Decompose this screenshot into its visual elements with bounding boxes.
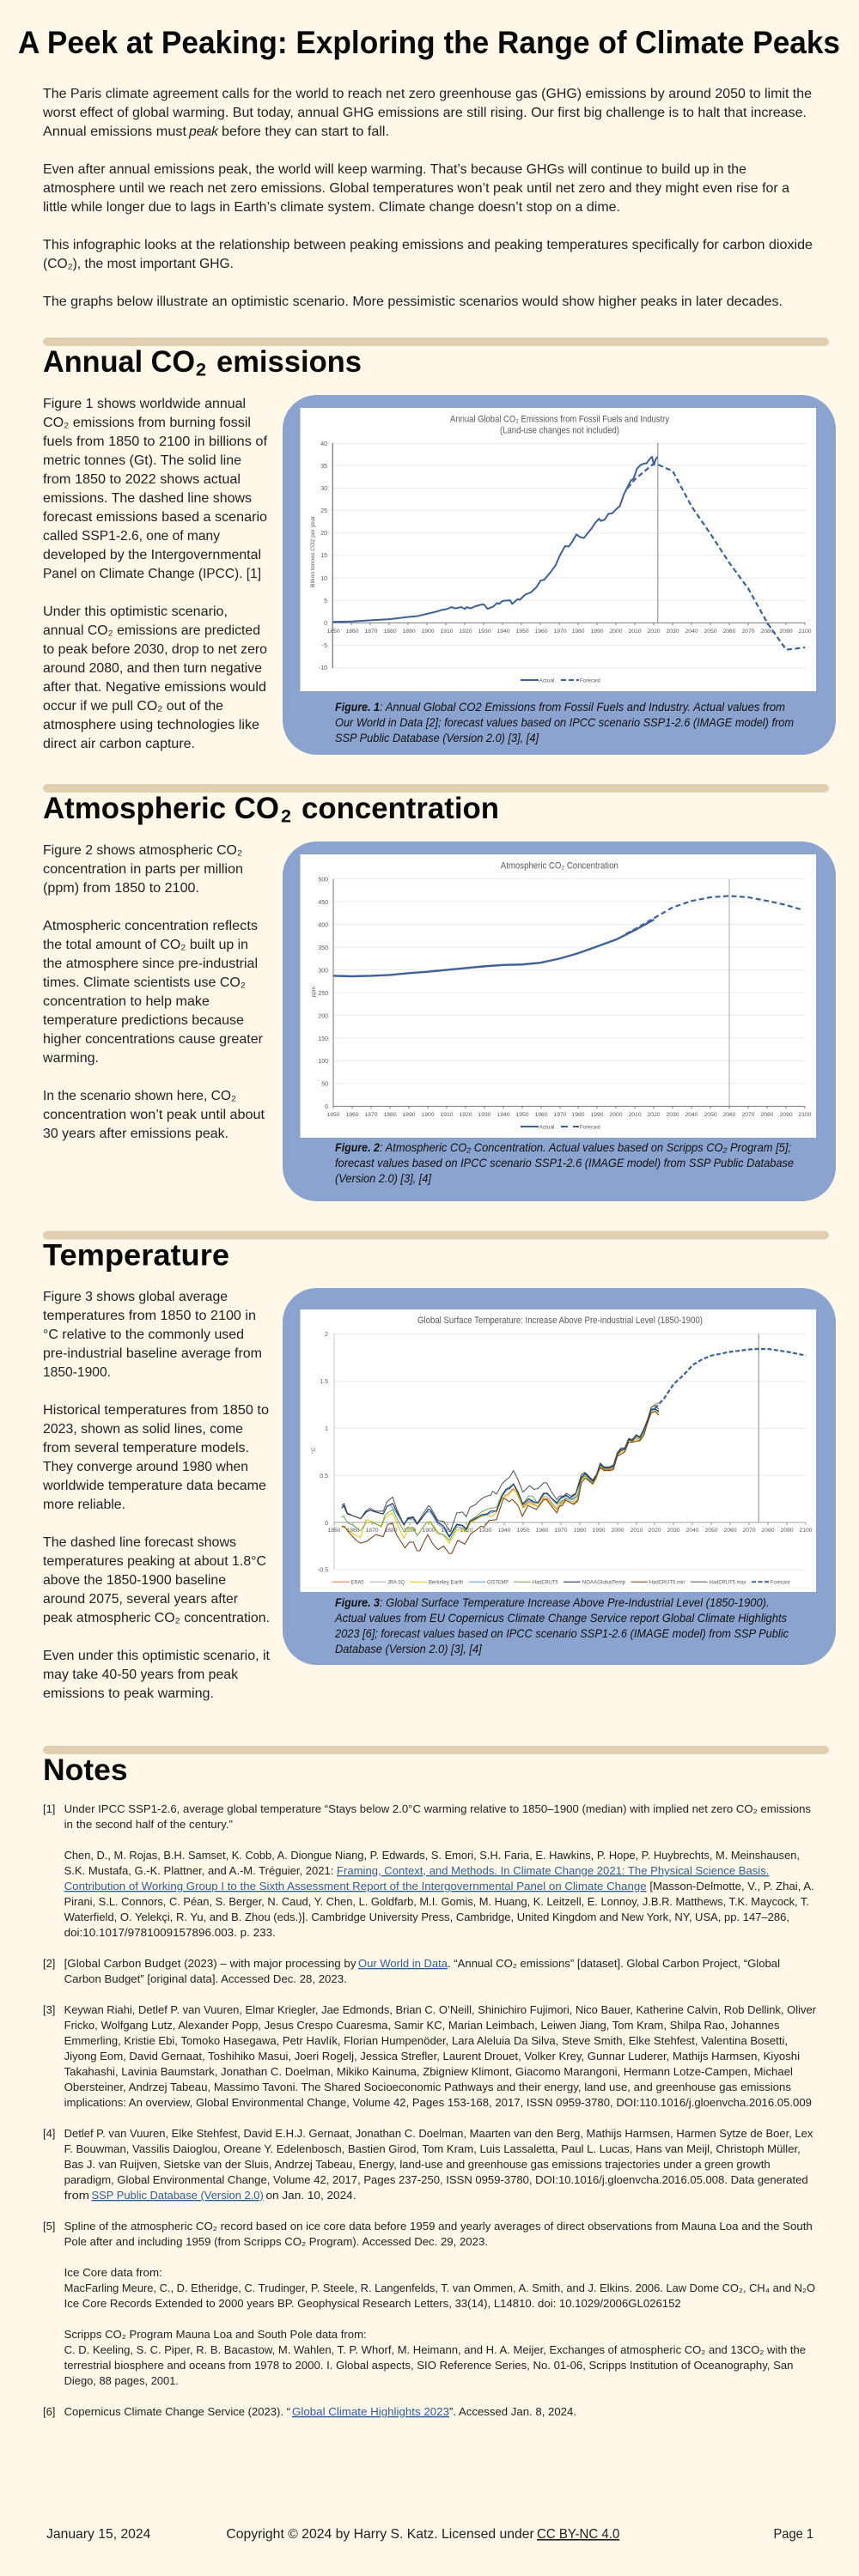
note 1: Framing, Context, and Methods. In Climate Change 2021: The Physical Science Basis. [337,1864,769,1877]
chart: atmospheric CO2 concentration: 2060 [722,1112,736,1118]
chart: global surface temperature: 1860 [346,1528,360,1534]
chart: global surface temperature: 2090 [780,1528,794,1534]
text block: figure 1 description: direct air carbon capture. [43,737,195,751]
text block: figure 3 description: from several temperature models. [43,1441,249,1455]
chart: annual global CO2 emissions: 2030 [666,629,679,635]
text block: figure 1 description: from 1850 to 2022 shows actual [43,472,241,487]
note 2: [Global Carbon Budget (2023) – with major processing by [64,1957,356,1970]
note 1: Waterfield, O. Yelekçi, R. Yu, and B. Zhou (eds.)]. Cambridge University Press, Cambridge, United Kingdom and New York, NY, USA, pp. 147–286, [64,1911,789,1923]
caption: figure 2: forecast values based on IPCC scenario SSP1-2.6 (IMAGE model) from SSP Public Database [335,1156,794,1170]
caption: figure 1: Our World in Data [2]; forecast values based on IPCC scenario SSP1-2.6 (IMAGE model) from [335,715,794,729]
chart: global surface temperature: 1850 [327,1528,341,1534]
chart legend [521,1125,600,1130]
chart legend: Actual [539,1125,555,1130]
chart: atmospheric CO2 concentration: 1880 [383,1112,397,1118]
caption: figure 3: Database (Version 2.0) [3], [4] [335,1642,483,1656]
chart: global surface temperature: 2000 [611,1528,624,1534]
note 6: [6] [43,2405,55,2418]
text block: figure 1 description: to peak before 2030, drop to net zero [43,642,267,657]
note 1: S.K. Mustafa, G.-K. Plattner, and A.-M. Tréguier, 2021: [64,1864,333,1877]
chart legend: GISTEMP [487,1580,509,1586]
chart: global surface temperature: 1980 [573,1528,587,1534]
text block: figure 1 description: occur if we pull CO₂ out of the [43,699,223,714]
chart: annual global CO2 emissions: 1880 [383,629,397,635]
chart: annual global CO2 emissions: 35 [320,464,327,470]
note 5: terrestrial biosphere and oceans from 1978 to 2000. I. Global aspects, SIO Reference Series, No. 01-06, Scripps Institution of Oceanography, San [64,2359,794,2372]
footer: Copyright © 2024 by Harry S. Katz. Licensed under [226,2527,534,2542]
text block: figure 3 description: may take 40-50 years from peak [43,1668,239,1682]
chart: annual global CO2 emissions: 2100 [798,629,812,635]
chart: atmospheric CO2 concentration: 0 [325,1104,328,1110]
note 4: [4] [43,2127,55,2140]
chart: atmospheric CO2 concentration: 1990 [590,1112,604,1118]
heading: annual emissions [43,345,362,380]
chart: annual global CO2 emissions: 30 [320,486,327,492]
chart legend: HadCRUT5 max [710,1580,746,1586]
caption: figure 2 [335,1140,794,1185]
caption: figure 1: SSP Public Database (Version 2.0) [3], [4] [335,731,539,744]
text block: figure 2 description: concentration in parts per million [43,862,243,877]
chart legend: Forecast [771,1580,790,1586]
chart: atmospheric CO2 concentration: 250 [318,991,328,997]
footer: CC BY-NC 4.0 [537,2527,619,2542]
chart: atmospheric CO2 concentration: 2030 [666,1112,679,1118]
chart: annual global CO2 emissions [301,408,816,691]
note 3: Jiyong Eom, David Gernaat, Toshihiko Masui, Joeri Rogelj, Jessica Strefler, Laurent Drouet, Volker Krey, Gunnar Luderer, Mathijs Harmsen, Kiyoshi [64,2050,800,2063]
intro text block: (CO₂), the most important GHG. [43,257,234,271]
chart: annual global CO2 emissions: 1920 [459,629,472,635]
chart: annual global CO2 emissions: 2040 [685,629,698,635]
heading: atmospheric concentration: Atmospheric CO [43,792,279,825]
text block: figure 2 description: times. Climate scientists use CO₂ [43,975,246,990]
text block: figure 1 description: around 2080, and then turn negative [43,661,262,676]
note 3: Keywan Riahi, Detlef P. van Vuuren, Elmar Kriegler, Jae Edmonds, Brian C. O’Neill, Shinichiro Fujimori, Nico Bauer, Katherine Calvin, Rob Dellink, Oliver [64,2003,817,2016]
note 5: C. D. Keeling, S. C. Piper, R. B. Bacastow, M. Wahlen, T. P. Whorf, M. Heimann, and H. A. Meijer, Exchanges of atmospheric CO₂ and 13CO₂ with the [64,2343,806,2356]
text block: figure 3 description: emissions to peak warming. [43,1686,214,1701]
chart: atmospheric CO2 concentration: 1860 [345,1112,359,1118]
chart: atmospheric CO2 concentration: 1930 [478,1112,491,1118]
caption: figure 2: Figure. 2 [335,1140,380,1154]
section: annual emissions [43,337,836,755]
chart: global surface temperature: 2 [325,1332,328,1338]
note 5: MacFarling Meure, C., D. Etheridge, C. Trudinger, P. Steele, R. Langenfelds, T. van Ommen, A. Smith, and J. Elkins. 2006. Law Dome CO₂, CH₄ and N₂O [64,2281,815,2294]
note 2: Our World in Data [358,1957,448,1970]
note 2: [2] [43,1957,55,1970]
text block: figure 3 description: 1850-1900. [43,1365,111,1380]
text block: figure 3 description: The dashed line forecast shows [43,1535,236,1550]
note 5: Scripps CO₂ Program Mauna Loa and South Pole data from: [64,2328,367,2341]
chart: global surface temperature: 1950 [516,1528,530,1534]
text block: figure 2 description: the atmosphere since pre-industrial [43,957,258,971]
chart: global surface temperature: 1900 [422,1528,436,1534]
chart legend [332,1580,790,1586]
text block: figure 3 description: Figure 3 shows global average [43,1290,228,1304]
chart: annual global CO2 emissions: 2080 [760,629,774,635]
chart: atmospheric CO2 concentration: 1940 [497,1112,510,1118]
text block: figure 3 description: temperatures from 1850 to 2100 in [43,1309,256,1323]
text block: figure 3 description: more reliable. [43,1498,125,1512]
heading: atmospheric concentration: concentration [302,792,499,825]
text block: figure 3 description: around 2075, several years after [43,1592,239,1607]
chart: global surface temperature: 1940 [497,1528,511,1534]
text block: figure 3 description: temperatures peaking at about 1.8°C [43,1554,266,1569]
chart: atmospheric CO2 concentration: 1950 [515,1112,529,1118]
chart: atmospheric CO2 concentration: Atmospheric CO₂ Concentration [501,861,618,872]
text block: figure 2 description: higher concentrations cause greater [43,1032,264,1047]
text block: figure 1 description: metric tonnes (Gt). The solid line [43,453,241,468]
chart: global surface temperature: 2080 [761,1528,775,1534]
note 5 [43,2220,815,2387]
text block: figure 2 description [42,843,265,1141]
chart: global surface temperature: 0 [325,1521,328,1527]
chart: atmospheric CO2 concentration: 1910 [440,1112,454,1118]
chart: atmospheric CO2 concentration: 400 [318,922,328,929]
caption: figure 3: : Global Surface Temperature Increase Above Pre-Industrial Level (1850-1900). [380,1595,770,1609]
footer [46,2527,813,2542]
title: A Peek at Peaking: Exploring the Range of Climate Peaks [18,25,840,60]
section: notes [43,1746,829,2418]
section: atmospheric concentration [42,784,836,1201]
text block: figure 1 description: forecast emissions based a scenario [43,510,267,525]
chart: global surface temperature: 1990 [592,1528,606,1534]
chart: global surface temperature: 0.5 [320,1473,328,1479]
text block: figure 1 description: called SSP1-2.6, one of many [43,529,220,544]
chart: atmospheric CO2 concentration: 50 [321,1082,328,1087]
chart: annual global CO2 emissions: 1890 [402,629,416,635]
chart: global surface temperature: 1930 [478,1528,492,1534]
text block: figure 3 description: pre-industrial baseline average from [43,1346,262,1361]
chart: atmospheric CO2 concentration: 2040 [685,1112,698,1118]
panel: figure 1 [283,395,836,755]
text block: figure 3 description [42,1290,271,1701]
chart: global surface temperature: 2040 [685,1528,699,1534]
intro text block: The graphs below illustrate an optimistic scenario. More pessimistic scenarios would show higher peaks in later decades. [43,295,783,309]
panel: figure 2 [283,841,836,1201]
heading: temperature: Temperature [43,1238,229,1273]
text block: figure 2 description: the total amount of CO₂ built up in [43,938,248,952]
caption: figure 1 [335,700,794,744]
chart: annual global CO2 emissions: 2070 [741,629,755,635]
chart: annual global CO2 emissions: -5 [322,643,327,649]
chart: atmospheric CO2 concentration: 1960 [534,1112,548,1118]
heading: atmospheric concentration: 2 [281,807,291,826]
text block: figure 1 description: annual CO₂ emissions are predicted [43,623,260,638]
note 4: on Jan. 10, 2024. [266,2189,356,2202]
text block: figure 3 description: °C relative to the commonly used [43,1327,244,1342]
chart: atmospheric CO2 concentration: 2070 [741,1112,755,1118]
chart: annual global CO2 emissions: 2090 [779,629,793,635]
caption: figure 3: Actual values from EU Copernicus Climate Change Service report Global Climate Highlights [334,1611,787,1625]
text block: figure 2 description: Atmospheric concentration reflects [43,919,258,933]
text block: figure 3 description: Even under this optimistic scenario, it [43,1649,271,1663]
note 1: [Masson-Delmotte, V., P. Zhai, A. [649,1880,814,1893]
chart: annual global CO2 emissions: 0 [324,621,327,627]
chart: annual global CO2 emissions: 1900 [421,629,435,635]
text block: figure 2 description: Figure 2 shows atmospheric CO₂ [43,843,242,858]
chart: atmospheric CO2 concentration: 100 [318,1059,328,1065]
chart: atmospheric CO2 concentration: ppm [311,987,317,997]
chart: annual global CO2 emissions: 1960 [534,629,548,635]
chart: atmospheric CO2 concentration: 500 [318,878,328,883]
note 3: [3] [43,2003,55,2016]
chart: annual global CO2 emissions: -10 [319,665,327,671]
chart: annual global CO2 emissions: 2000 [609,629,623,635]
note 1: Under IPCC SSP1-2.6, average global temperature “Stays below 2.0°C warming relative to 1850–1900 (median) with implied net zero CO₂ emissions [64,1802,811,1815]
chart: global surface temperature: 2020 [648,1528,661,1534]
chart: annual global CO2 emissions: 1910 [440,629,454,635]
chart legend: Forecast [580,1125,600,1130]
text block: figure 2 description: 30 years after emissions peak. [43,1127,228,1141]
chart: annual global CO2 emissions: 1860 [345,629,359,635]
heading: annual emissions: 2 [196,361,206,380]
chart: annual global CO2 emissions: 1850 [326,629,340,635]
note 1: Pirani, S.L. Connors, C. Péan, S. Berger, N. Caud, Y. Chen, L. Goldfarb, M.I. Gomis, M. Huang, K. Leitzell, E. Lonnoy, J.B.R. Matthews, T.K. Maycock, T. [64,1895,809,1908]
caption: figure 1: Figure. 1 [335,700,380,714]
chart: annual global CO2 emissions: 2020 [647,629,661,635]
note 5: Spline of the atmospheric CO₂ record based on ice core data before 1959 and yearly averages of direct observations from Mauna Loa and the South [64,2220,813,2233]
footer: January 15, 2024 [46,2527,150,2542]
text block: figure 1 description: developed by the Intergovernmental [43,548,261,562]
note 6: Global Climate Highlights 2023 [292,2405,449,2418]
chart legend: ERA5 [350,1580,364,1586]
chart legend: NOAAGlobalTemp [582,1580,625,1586]
chart: global surface temperature: 2060 [723,1528,737,1534]
note 3: Emmerling, Kristie Ebi, Tomoko Hasegawa, Petr Havlík, Florian Humpenöder, Lara Aleluia Da Silva, Steve Smith, Elke Stehfest, Valentina Bosetti, [64,2034,788,2047]
note 1 [43,1802,814,1939]
chart: global surface temperature: 2050 [704,1528,718,1534]
caption: figure 2: (Version 2.0) [3], [4] [335,1171,432,1185]
text block: figure 1 description: atmosphere using technologies like [43,718,259,732]
chart: atmospheric CO2 concentration: 1970 [553,1112,567,1118]
note 3: Obersteiner, Andrzej Tabeau, Massimo Tavoni. The Shared Socioeconomic Pathways and their energy, land use, and greenhouse gas emissions [64,2081,791,2093]
note 4: from [64,2189,89,2202]
chart: annual global CO2 emissions: 10 [320,576,327,582]
caption: figure 2: : Atmospheric CO₂ Concentration. Actual values based on Scripps CO₂ Program [5]; [380,1140,791,1154]
intro text block: worst effect of global warming. But today, annual GHG emissions are still rising. Our first big challenge is to halt that increase. [42,106,807,120]
intro text block: little while longer due to lags in Earth’s climate system. Climate change doesn’t stop on a dime. [43,200,620,215]
text block: figure 3 description: They converge around 1980 when [43,1460,248,1474]
note 6: Copernicus Climate Change Service (2023). “ [64,2405,290,2418]
chart: atmospheric CO2 concentration: 200 [318,1013,328,1020]
text block: figure 3 description: worldwide temperature data became [42,1479,266,1493]
chart: annual global CO2 emissions: 20 [320,531,327,537]
chart: annual global CO2 emissions: 1980 [571,629,585,635]
chart: atmospheric CO2 concentration [301,854,816,1138]
chart: global surface temperature: 1 [325,1426,328,1432]
text block: figure 3 description: above the 1850-1900 baseline [43,1573,226,1588]
intro text block [42,87,813,309]
chart: atmospheric CO2 concentration: 1920 [459,1112,472,1118]
chart: annual global CO2 emissions: 1950 [515,629,529,635]
chart: atmospheric CO2 concentration: 2050 [704,1112,717,1118]
text block: figure 2 description: (ppm) from 1850 to 2100. [43,881,199,896]
note 6: ”. Accessed Jan. 8, 2024. [449,2405,576,2418]
note 2: Carbon Budget” [original data]. Accessed Dec. 28, 2023. [64,1972,347,1985]
intro text block: Annual emissions must [43,125,187,139]
chart: annual global CO2 emissions: 2060 [722,629,736,635]
note 5: Ice Core Records Extended to 2000 years BP. Geophysical Research Letters, 33(14), L14810. doi: 10.1029/2006GL026152 [64,2297,681,2310]
chart: annual global CO2 emissions: 25 [320,508,327,514]
text block: figure 3 description: 2023, shown as solid lines, come [43,1422,243,1437]
chart legend: Forecast [580,678,600,683]
chart: global surface temperature: 1870 [365,1528,379,1534]
text block: figure 3 description: peak atmospheric CO₂ concentration. [43,1611,270,1625]
chart: atmospheric CO2 concentration: 2020 [647,1112,661,1118]
chart: atmospheric CO2 concentration: 1980 [571,1112,585,1118]
note 3: Takahashi, Lavinia Baumstark, Jonathan C. Doelman, Mikiko Kainuma, Zbigniew Klimont, Giacomo Marangoni, Hermann Lotze-Campen, Michael [64,2065,793,2078]
text block: figure 2 description: concentration won’t peak until about [43,1108,265,1122]
chart legend: JRA-3Q [387,1580,405,1586]
text block: figure 3 description: Historical temperatures from 1850 to [43,1403,269,1418]
intro text block: before they can start to fall. [222,125,389,139]
chart legend [521,678,600,683]
text block: figure 2 description: temperature predictions because [43,1013,244,1028]
text block: figure 1 description: fuels from 1850 to 2100 in billions of [43,434,268,449]
heading: annual emissions: Annual CO [43,345,195,379]
chart: annual global CO2 emissions: (Land-use changes not included) [500,426,619,436]
text block: figure 1 description [43,397,268,751]
chart: atmospheric CO2 concentration: 450 [318,900,328,906]
intro text block: Even after annual emissions peak, the world will keep warming. That’s because GHGs will continue to build up in the [43,162,746,177]
note 2: . “Annual CO₂ emissions” [dataset]. Global Carbon Project, “Global [448,1957,780,1970]
note 1: Contribution of Working Group I to the Sixth Assessment Report of the Intergovernmental Panel on Climate Change [64,1880,647,1893]
caption: figure 3: Figure. 3 [335,1595,380,1609]
intro text block: peak [188,125,219,139]
caption: figure 3 [334,1595,789,1656]
chart: global surface temperature: °C [310,1447,317,1454]
chart: annual global CO2 emissions: 1990 [590,629,604,635]
note 4: F. Bouwman, Vassilis Daioglou, Oreane Y. Edelenbosch, Bastien Girod, Tom Kram, Luis Lassaletta, Paul L. Lucas, Hans van Meijl, Christoph Müller, [64,2142,801,2155]
chart: annual global CO2 emissions: 1930 [478,629,491,635]
chart: annual global CO2 emissions: 5 [324,598,327,605]
chart: annual global CO2 emissions: Annual Global CO₂ Emissions from Fossil Fuels and Industry [450,415,669,425]
note 2 [43,1957,780,1985]
chart: global surface temperature: 1.5 [320,1379,328,1385]
chart: global surface temperature: 2030 [667,1528,680,1534]
chart: atmospheric CO2 concentration: 150 [318,1036,328,1042]
text block: figure 1 description: Under this optimistic scenario, [43,605,228,619]
chart: global surface temperature: 1970 [554,1528,568,1534]
note 4: SSP Public Database (Version 2.0) [91,2189,264,2202]
heading: notes: Notes [43,1753,128,1787]
chart: annual global CO2 emissions: 40 [320,441,327,447]
text block: figure 2 description: In the scenario shown here, CO₂ [43,1089,236,1103]
note 4 [43,2127,813,2202]
chart: annual global CO2 emissions: 1970 [553,629,567,635]
text block: figure 1 description: Figure 1 shows worldwide annual [43,397,246,411]
chart legend: Actual [539,678,555,683]
note 6 [43,2405,576,2418]
note 1: Chen, D., M. Rojas, B.H. Samset, K. Cobb, A. Diongue Niang, P. Edwards, S. Emori, S.H. Faria, E. Hawkins, P. Hope, P. Huybrechts, M. Meinshausen, [64,1849,800,1862]
chart: atmospheric CO2 concentration: 350 [318,945,328,951]
note 5: Diego, 88 pages, 2001. [64,2374,179,2387]
note 1: doi:10.1017/9781009157896.003. p. 233. [64,1926,276,1939]
chart: atmospheric CO2 concentration: 2000 [609,1112,623,1118]
chart: global surface temperature: 1880 [384,1528,398,1534]
caption: figure 3: 2023 [6]; forecast values based on IPCC scenario SSP1-2.6 (IMAGE model) from SSP Public [334,1626,789,1640]
chart: global surface temperature: 1890 [403,1528,417,1534]
intro text block: This infographic looks at the relationship between peaking emissions and peaking temperatures specifically for carbon dioxide [43,238,813,252]
text block: figure 1 description: emissions. The dashed line shows [43,491,252,506]
note 1: in the second half of the century.” [64,1818,233,1831]
note 1: [1] [43,1802,55,1815]
text block: figure 2 description: warming. [42,1051,99,1066]
intro text block: The Paris climate agreement calls for the world to reach net zero greenhouse gas (GHG) emissions by around 2050 to limit the [43,87,812,101]
chart: annual global CO2 emissions: 1940 [497,629,510,635]
chart: atmospheric CO2 concentration: 1850 [326,1112,340,1118]
chart: atmospheric CO2 concentration: 1900 [421,1112,435,1118]
note 5: Ice Core data from: [64,2266,162,2279]
note 3: Fricko, Wolfgang Lutz, Alexander Popp, Jesus Crespo Cuaresma, Samir KC, Marian Leimbach, Leiwen Jiang, Tom Kram, Shilpa Rao, Johannes [64,2019,780,2032]
chart: atmospheric CO2 concentration: 2090 [779,1112,793,1118]
note 3 [43,2003,817,2109]
chart: atmospheric CO2 concentration: 300 [318,969,328,974]
chart legend: Berkeley Earth [429,1580,464,1586]
chart: global surface temperature: Global Surface Temperature: Increase Above Pre-industrial Level (1850-1900) [417,1315,703,1326]
chart legend: HadCRUT5 min [649,1580,685,1586]
text block: figure 1 description: after that. Negative emissions would [43,680,266,695]
note 5: [5] [43,2220,55,2233]
chart: annual global CO2 emissions: 1870 [364,629,378,635]
chart: global surface temperature: 1960 [535,1528,549,1534]
chart: atmospheric CO2 concentration: 2080 [760,1112,774,1118]
heading: annual emissions: emissions [216,345,362,379]
chart: atmospheric CO2 concentration: 1870 [364,1112,378,1118]
chart: global surface temperature: 1920 [460,1528,473,1534]
section: temperature [42,1231,836,1701]
chart: global surface temperature [301,1309,816,1592]
footer: Page 1 [773,2527,813,2542]
note 4: Bas J. van Ruijven, Sietske van der Sluis, Andrzej Tabeau, Energy, land-use and greenhouse gas emissions trajectories under a green growth [64,2158,771,2171]
chart legend: HadCRUT5 [533,1580,558,1586]
chart: global surface temperature: 1910 [441,1528,454,1534]
note 4: Detlef P. van Vuuren, Elke Stehfest, David E.H.J. Gernaat, Jonathan C. Doelman, Maarten van den Berg, Mathijs Harmsen, Harmen Sytze de Boer, Lex [64,2127,813,2140]
chart: global surface temperature: 2070 [742,1528,756,1534]
intro text block: atmosphere until we reach net zero emissions. Global temperatures won’t peak until net zero and they might even rise for a [43,181,789,196]
chart: annual global CO2 emissions: Billion tonnes CO2 per year [310,515,316,587]
chart: annual global CO2 emissions: 2010 [628,629,642,635]
caption: figure 1: : Annual Global CO2 Emissions from Fossil Fuels and Industry. Actual values from [380,700,785,714]
note 5: Pole after and including 1959 (from Scripps CO₂ Program). Accessed Dec. 29, 2023. [64,2235,488,2248]
heading: atmospheric concentration [43,792,499,826]
chart: annual global CO2 emissions: 2050 [704,629,717,635]
panel: figure 3 [283,1288,836,1665]
chart: global surface temperature: -0.5 [318,1568,328,1573]
note 4: paradigm, Global Environmental Change, Volume 42, 2017, Pages 237-250, ISSN 0959-3780, DOI:10.1016/j.gloenvcha.2016.05.008. Data generated [64,2173,808,2186]
chart: global surface temperature: 2010 [630,1528,643,1534]
text block: figure 1 description: Panel on Climate Change (IPCC). [1] [43,567,261,581]
chart: atmospheric CO2 concentration: 2010 [628,1112,642,1118]
text block: figure 1 description: CO₂ emissions from burning fossil [43,416,251,430]
chart: atmospheric CO2 concentration: 1890 [402,1112,416,1118]
chart: annual global CO2 emissions: 15 [320,553,327,559]
note 3: implications: An overview, Global Environmental Change, Volume 42, Pages 153-168, 2017, ISSN 0959-3780, DOI:110.1016/j.gloenvcha.2016.05.009 [64,2096,812,2109]
text block: figure 2 description: concentration to help make [43,994,210,1009]
chart: atmospheric CO2 concentration: 2100 [798,1112,812,1118]
chart: global surface temperature: 2100 [799,1528,813,1534]
